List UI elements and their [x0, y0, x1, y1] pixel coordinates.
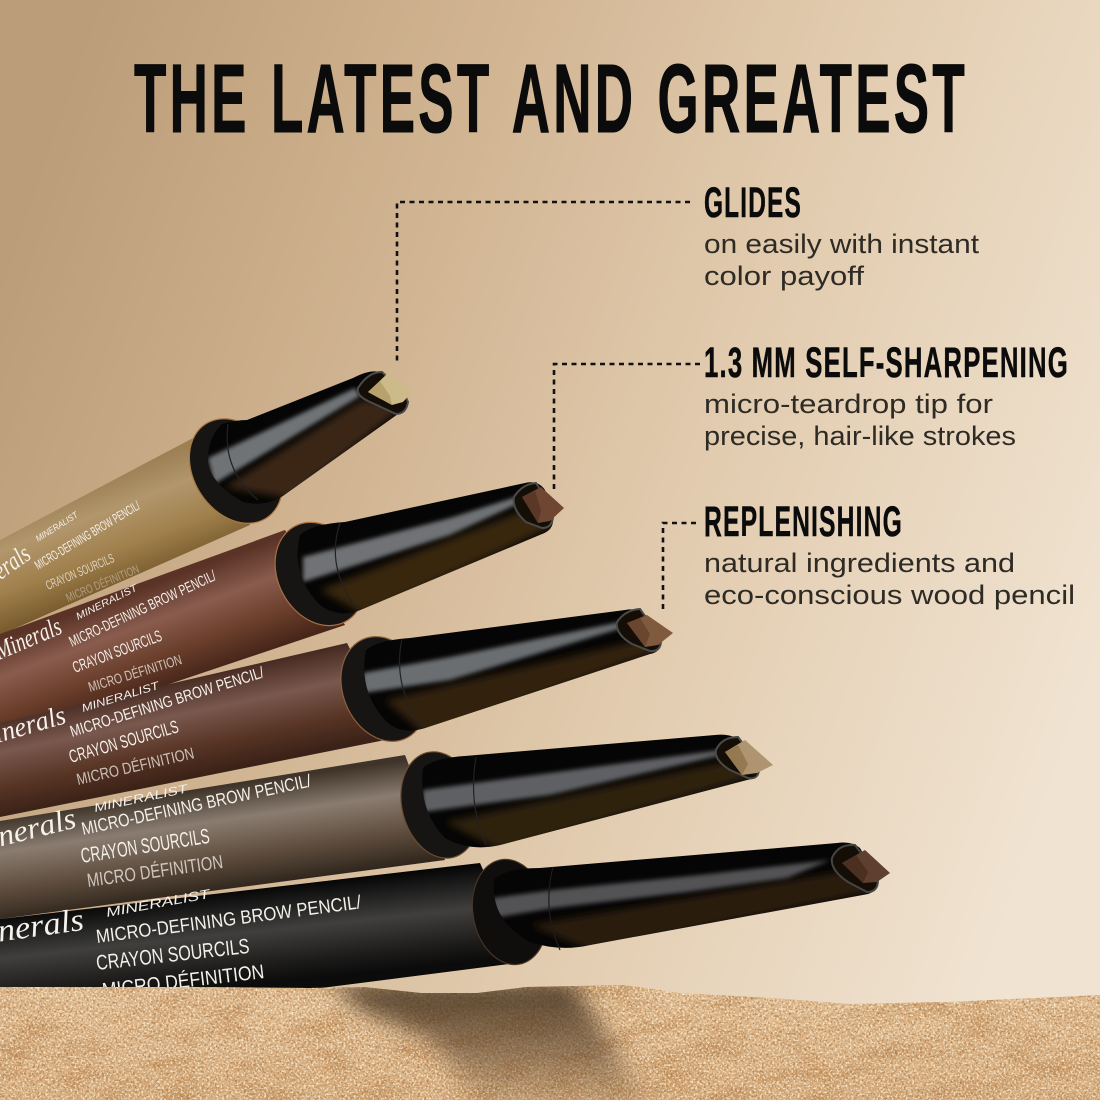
barrel label: MINERALIST	[34, 509, 81, 544]
barrel label: MICRO-DEFINING BROW PENCIL/	[68, 664, 266, 741]
barrel label	[0, 567, 219, 695]
barrel label: MICRO DÉFINITION	[86, 852, 224, 892]
stone texture	[0, 980, 1100, 1100]
collar	[464, 853, 556, 971]
callout: replenishing	[704, 498, 1075, 610]
description: replenishing	[704, 548, 1075, 610]
heading: replenishing: REPLENISHING	[704, 498, 903, 546]
point ring	[716, 737, 759, 778]
barrel label: MICRO-DEFINING BROW PENCIL/	[95, 892, 363, 948]
collar	[390, 743, 490, 867]
black tip section	[208, 371, 406, 504]
barrel label	[0, 498, 143, 605]
point ring	[832, 845, 878, 892]
tube reflections	[423, 750, 760, 850]
barrel label: MICRO DÉFINITION	[63, 561, 141, 605]
collar	[170, 401, 302, 541]
description: replenishing: natural ingredients and	[704, 548, 1015, 578]
stone ledge	[0, 980, 1100, 1100]
tube reflections	[208, 388, 405, 498]
barrel	[0, 437, 250, 635]
barrel label: MINERALIST	[93, 781, 191, 815]
tube reflections	[493, 860, 880, 950]
description: self-sharpening	[704, 389, 1016, 451]
barrel label	[0, 771, 313, 892]
callout: glides	[704, 179, 980, 291]
lead tip	[522, 487, 564, 523]
lead tip	[842, 850, 890, 883]
tube step line	[335, 523, 358, 610]
barrel label: MICRO DÉFINITION	[75, 743, 196, 789]
collar	[258, 507, 382, 641]
point ring	[617, 609, 661, 651]
black tip section	[422, 735, 757, 847]
tube step line	[227, 424, 258, 500]
pencil 4: taupe	[0, 735, 773, 919]
lead tip	[627, 615, 673, 647]
barrel label: CRAYON SOURCILS	[67, 716, 181, 767]
tube step line	[549, 867, 560, 950]
barrel label: CRAYON SOURCILS	[43, 550, 117, 593]
barrel label: MINERALIST	[80, 680, 162, 715]
barrel label: MICRO-DEFINING BROW PENCIL/	[80, 771, 313, 839]
barrel	[0, 755, 445, 919]
barrel label: MICRO DÉFINITION	[86, 651, 184, 695]
pencil 2: auburn	[0, 482, 564, 741]
description: glides	[704, 229, 980, 291]
lead tip	[368, 374, 413, 405]
tube step line	[474, 757, 486, 845]
description: replenishing: eco-conscious wood pencil	[704, 580, 1075, 610]
collar	[326, 624, 442, 754]
heading: glides: GLIDES	[704, 179, 802, 227]
barrel	[0, 863, 525, 1022]
barrel	[0, 530, 345, 741]
tube step line	[400, 639, 422, 728]
callout leader: replenishing	[663, 523, 696, 612]
point ring	[358, 372, 408, 414]
pencil 3: brown	[0, 609, 673, 817]
black tip section	[298, 482, 553, 613]
barrel label: MINERALIST	[74, 583, 140, 623]
tube reflections	[363, 622, 662, 735]
callout: self-sharpening	[704, 339, 1069, 451]
black tip section	[494, 843, 878, 948]
callout leader: glides	[397, 202, 690, 362]
point ring	[514, 483, 553, 528]
pencil 1: gold	[0, 371, 413, 635]
callout leader: self-sharpening	[554, 364, 700, 490]
barrel label: MINERALIST	[105, 886, 212, 920]
barrel label: MICRO DÉFINITION	[101, 960, 265, 1002]
barrel label: CRAYON SOURCILS	[79, 825, 211, 868]
stone surface	[0, 985, 1100, 1100]
barrel label: CRAYON SOURCILS	[70, 628, 164, 677]
black tip section	[364, 609, 660, 731]
barrel label: MICRO-DEFINING BROW PENCIL/	[32, 498, 143, 573]
tube reflections	[303, 495, 555, 615]
barrel label: CRAYON SOURCILS	[95, 935, 251, 975]
barrel label	[0, 664, 266, 789]
barrel label: MICRO-DEFINING BROW PENCIL/	[67, 567, 219, 651]
barrel label	[0, 886, 363, 1002]
barrel	[0, 643, 395, 817]
description: self-sharpening: micro-teardrop tip for	[704, 389, 993, 419]
description: glides: color payoff	[704, 261, 865, 291]
pencil 5: black	[0, 842, 890, 988]
description: glides: on easily with instant	[704, 229, 980, 259]
lead tip	[725, 740, 773, 775]
description: self-sharpening: precise, hair-like strokes	[704, 421, 1016, 451]
